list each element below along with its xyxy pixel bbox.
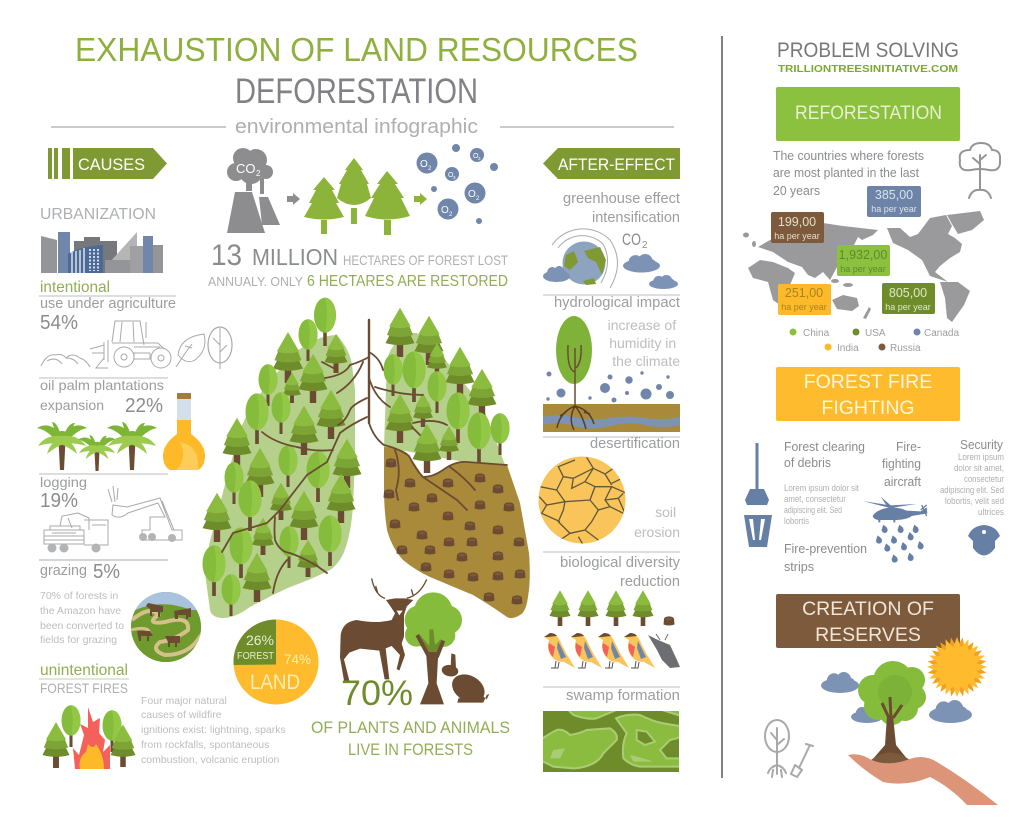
map legend bbox=[790, 328, 959, 354]
stat: 13 million hectares: 6 HECTARES ARE RESTORED bbox=[307, 273, 508, 290]
map label: 805,00 USA: 805,00 bbox=[889, 286, 927, 300]
stat: 13 million hectares: HECTARES OF FOREST LOST bbox=[343, 252, 508, 268]
icon: globe with CO2: 2 bbox=[642, 240, 648, 251]
text: use under agriculture: use under agriculture bbox=[40, 296, 176, 312]
text: soil erosion: erosion bbox=[634, 524, 680, 540]
right lung upper bbox=[384, 333, 507, 470]
text: forest clearing of debris: Forest clearing bbox=[784, 439, 865, 454]
right lung trees bbox=[384, 308, 510, 473]
text: forest clearing of debris: of debris bbox=[784, 455, 831, 470]
text: countries description: The countries where forests bbox=[773, 149, 924, 163]
text: lorem left: amet, consectetur bbox=[784, 494, 846, 504]
map legend: Russia bbox=[890, 343, 921, 354]
text: wildfire causes: causes of wildfire bbox=[141, 709, 222, 721]
text: lorem right: dolor sit amet, bbox=[954, 463, 1004, 473]
text: security: Security bbox=[960, 437, 1003, 452]
icon: oxygen bubbles: 2 bbox=[428, 166, 432, 172]
text: countries description: are most planted in the last bbox=[773, 166, 920, 180]
text: forest fires: FOREST FIRES bbox=[40, 680, 128, 696]
text: logging: logging bbox=[40, 474, 87, 490]
map label: 1,932,00 China: 1,932,00 bbox=[839, 248, 887, 262]
icon: globe with CO2: CO bbox=[622, 230, 641, 249]
icon: sapling and shovel bbox=[765, 720, 813, 777]
text: desertification: desertification bbox=[590, 436, 680, 452]
icon: hills and tractor bbox=[41, 321, 232, 369]
arrow: green bbox=[414, 193, 427, 205]
map label: 199,00 Russia bbox=[771, 212, 824, 243]
text: plants and animals: LIVE IN FORESTS bbox=[348, 741, 473, 759]
number: 19%: 19% bbox=[40, 490, 78, 512]
text: wildfire causes: from rockfalls, spontaneous bbox=[141, 739, 269, 751]
map label: 385,00 Canada: ha per year bbox=[871, 204, 917, 214]
text: greenhouse effect: greenhouse effect bbox=[563, 191, 680, 207]
heading: problem solving: TRILLIONTREESINITIATIVE.COM bbox=[778, 64, 958, 75]
map label: 1,932,00 China bbox=[837, 245, 890, 276]
text: lorem left: adipiscing elit. Sed bbox=[784, 505, 842, 515]
icon: factory with CO2 cloud: 2 bbox=[256, 169, 261, 178]
pie chart: land and forest bbox=[233, 620, 318, 704]
arrow: grey bbox=[287, 193, 300, 205]
map legend: USA bbox=[865, 328, 886, 339]
map label: 805,00 USA bbox=[882, 283, 935, 314]
number: 5%: 5% bbox=[93, 561, 120, 583]
icon: clouds bbox=[821, 672, 972, 723]
text: fire-prevention strips: strips bbox=[784, 559, 814, 574]
text: intentional: intentional bbox=[40, 279, 110, 296]
pie chart: land and forest: FOREST bbox=[237, 651, 274, 662]
icon: oxygen bubbles: 3 bbox=[453, 175, 456, 180]
panel heading: forest fire fighting: FOREST FIRE bbox=[804, 371, 932, 393]
map label: 251,00 India bbox=[778, 284, 831, 315]
text: fire-fighting aircraft: aircraft bbox=[884, 474, 921, 489]
panel heading: creation of reserves: CREATION OF bbox=[802, 598, 934, 620]
text: forest clearing of debris bbox=[784, 439, 865, 470]
heading: urbanization: URBANIZATION bbox=[40, 206, 156, 223]
title: EXHAUSTION OF LAND RESOURCES bbox=[75, 31, 638, 68]
banner: after-effect bbox=[543, 148, 680, 179]
bronchi bbox=[222, 320, 507, 593]
icon: forest fire bbox=[42, 705, 136, 769]
icon: oxygen bubbles: O bbox=[441, 205, 449, 216]
map legend: China bbox=[803, 328, 830, 339]
pie chart: land and forest: 26% bbox=[246, 632, 274, 648]
number: 54%: 54% bbox=[40, 312, 78, 334]
text: unintentional: unintentional bbox=[40, 662, 128, 679]
icon: birds bbox=[544, 633, 680, 668]
left lung bbox=[205, 335, 355, 618]
panel heading: forest fire fighting bbox=[776, 367, 960, 421]
icon: factory with CO2 cloud: CO bbox=[236, 161, 256, 176]
map label: 385,00 Canada bbox=[867, 186, 921, 217]
icon: oxygen bubbles: O bbox=[448, 172, 454, 179]
text: greenhouse effect bbox=[563, 191, 680, 226]
icon: oxygen bubbles: O bbox=[473, 153, 479, 160]
banner: after-effect: AFTER-EFFECT bbox=[558, 156, 675, 174]
stat: 70%: 70% bbox=[341, 674, 413, 713]
map legend: Canada bbox=[924, 328, 959, 339]
text: lorem left: lobortis bbox=[784, 516, 809, 526]
map label: 251,00 India: 251,00 bbox=[785, 286, 823, 300]
heading: problem solving bbox=[777, 39, 959, 75]
text: swamp formation: swamp formation bbox=[566, 688, 680, 704]
subtitle: deforestation: DEFORESTATION bbox=[235, 72, 478, 111]
icon: cracked earth bbox=[538, 453, 627, 545]
icon: oxygen bubbles: 2 bbox=[449, 212, 453, 218]
icon: logging truck bbox=[44, 513, 108, 552]
icon: oxygen bubbles: 3 bbox=[478, 156, 481, 161]
text: fire-prevention strips: Fire-prevention bbox=[784, 541, 867, 556]
text: Amazon grazing note: the Amazon have bbox=[40, 605, 121, 617]
text: wildfire causes: combustion, volcanic eruption bbox=[141, 754, 279, 766]
stat: 13 million hectares: ANNUALY. ONLY bbox=[208, 274, 303, 289]
icon: tree, soil and humidity bbox=[543, 316, 680, 432]
banner: causes: CAUSES bbox=[78, 156, 145, 174]
right lung deforested bbox=[384, 447, 530, 618]
map label: 199,00 Russia: 199,00 bbox=[778, 215, 816, 229]
pie chart: land and forest: 74% bbox=[284, 651, 311, 667]
text: lorem right: adipiscing elit. Sed bbox=[940, 485, 1004, 495]
icon: harvester machine bbox=[108, 486, 182, 542]
map legend: India bbox=[837, 343, 859, 354]
stat: 13 million hectares: 13 bbox=[211, 239, 242, 272]
icon: swamp bbox=[540, 708, 683, 772]
world map bbox=[743, 211, 984, 322]
stumps bbox=[384, 458, 526, 604]
text: lorem right: Lorem ipsum bbox=[958, 452, 1004, 462]
illustration: lungs forest bbox=[202, 298, 530, 618]
icon: grazing field bbox=[131, 592, 201, 662]
text: plants and animals bbox=[311, 719, 510, 759]
text: biological diversity reduction: biological diversity bbox=[560, 555, 681, 571]
text: increase of humidity: the climate bbox=[612, 353, 680, 369]
heading: problem solving: PROBLEM SOLVING bbox=[777, 39, 959, 62]
text: lorem right: consectetur bbox=[964, 474, 1004, 484]
icon: palms bbox=[37, 422, 157, 471]
text: countries description: 20 years bbox=[773, 184, 820, 198]
panel heading: creation of reserves bbox=[776, 594, 960, 648]
icon: factory with CO2 cloud bbox=[227, 148, 280, 233]
text: soil erosion: soil bbox=[655, 504, 676, 520]
icon: oxygen bubbles: O bbox=[420, 159, 428, 170]
icon: oxygen bubbles: O bbox=[468, 189, 476, 200]
text: expansion: expansion bbox=[40, 397, 104, 413]
panel heading: reforestation: REFORESTATION bbox=[795, 102, 942, 124]
text: greenhouse effect: intensification bbox=[592, 210, 680, 226]
stat: 13 million hectares: MILLION bbox=[252, 244, 338, 270]
icon: broom and bucket bbox=[744, 443, 772, 547]
left lung trees bbox=[202, 298, 362, 616]
panel heading: forest fire fighting: FIGHTING bbox=[821, 397, 915, 419]
map label: 385,00 Canada: 385,00 bbox=[875, 188, 913, 202]
icon: city skyline bbox=[41, 232, 163, 273]
icon: sun bbox=[922, 632, 992, 702]
text: increase of humidity: increase of bbox=[608, 317, 676, 333]
text: increase of humidity: humidity in bbox=[609, 335, 676, 351]
panel heading: reforestation bbox=[776, 87, 960, 141]
icon: security cap bbox=[968, 525, 1000, 556]
text: fire-prevention strips bbox=[784, 541, 867, 574]
text: lorem left: Lorem ipsum dolor sit bbox=[784, 483, 859, 493]
text: Amazon grazing note: 70% of forests in bbox=[40, 590, 118, 602]
map label: 805,00 USA: ha per year bbox=[885, 302, 931, 312]
icon: tree on hand bbox=[848, 661, 998, 805]
icon: oxygen bubbles: 2 bbox=[476, 196, 480, 202]
stat: 13 million hectares bbox=[208, 239, 508, 290]
icon: three green trees bbox=[304, 158, 410, 235]
text: lorem right: lobortis, velit sed bbox=[945, 496, 1004, 506]
text: biological diversity reduction bbox=[560, 555, 681, 590]
text: biological diversity reduction: reduction bbox=[620, 574, 680, 590]
number: 22%: 22% bbox=[125, 395, 163, 417]
map label: 1,932,00 China: ha per year bbox=[840, 264, 886, 274]
subtitle: environmental infographic: environmental infographic bbox=[235, 116, 478, 138]
text: Amazon grazing note: fields for grazing bbox=[40, 634, 117, 646]
text: plants and animals: OF PLANTS AND ANIMALS bbox=[311, 719, 510, 737]
icon: oil bottle bbox=[163, 393, 205, 470]
pie chart: land and forest: LAND bbox=[250, 671, 300, 694]
icon: globe with CO2 bbox=[543, 229, 678, 289]
text: hydrological impact: hydrological impact bbox=[554, 295, 680, 311]
map label: 251,00 India: ha per year bbox=[781, 302, 827, 312]
icon: trees and stump bbox=[550, 590, 674, 626]
map label: 199,00 Russia: ha per year bbox=[774, 231, 820, 241]
text: fire-fighting aircraft: Fire- bbox=[896, 439, 921, 454]
text: grazing: grazing bbox=[40, 562, 87, 579]
text: wildfire causes: ignitions exist: lightning, sparks bbox=[141, 724, 286, 736]
text: lorem right: ultrices bbox=[978, 507, 1004, 517]
banner: causes bbox=[48, 148, 167, 179]
text: Amazon grazing note: been converted to bbox=[40, 620, 124, 632]
illustration: deer, tree and hare bbox=[340, 578, 490, 708]
icon: oxygen bubbles bbox=[416, 144, 498, 224]
text: fire-fighting aircraft: fighting bbox=[882, 456, 921, 471]
text: oil palm plantations: oil palm plantations bbox=[40, 377, 164, 393]
icon: helicopter with water bbox=[863, 497, 927, 563]
panel heading: creation of reserves: RESERVES bbox=[815, 624, 921, 646]
text: wildfire causes: Four major natural bbox=[141, 695, 227, 707]
icon: tree outline bbox=[960, 143, 1000, 198]
